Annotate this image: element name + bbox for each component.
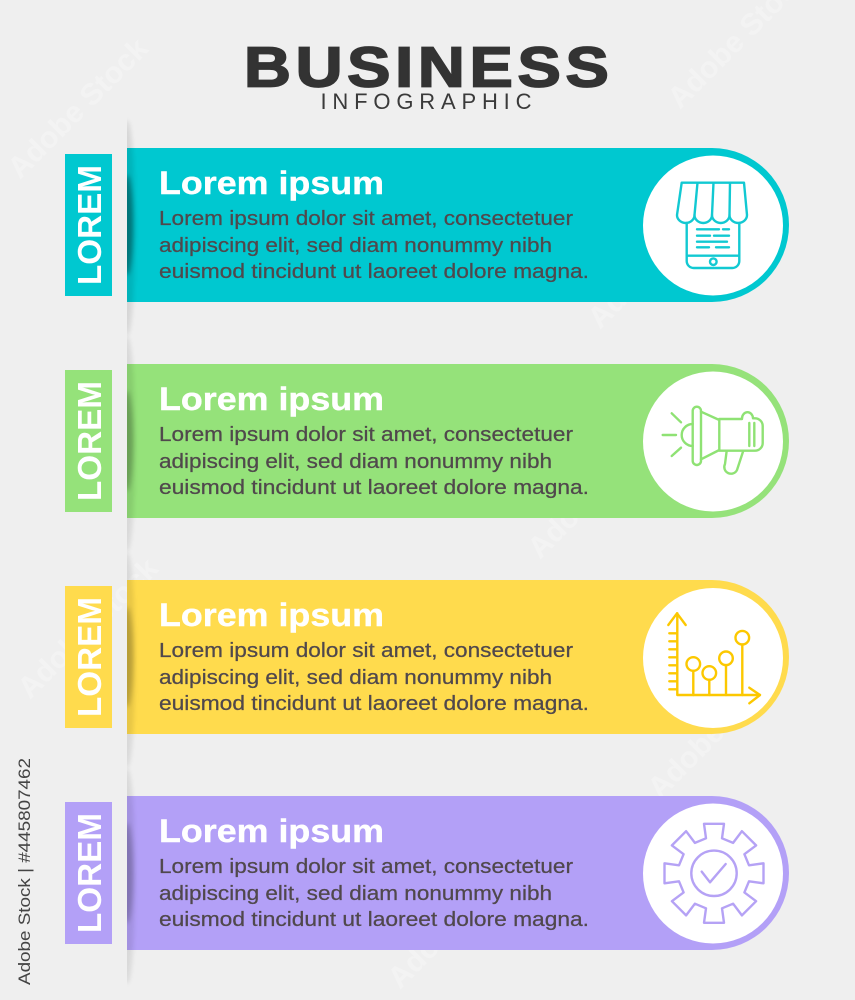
banner bbox=[127, 580, 789, 734]
panel body text: adipiscing elit, sed diam nonummy nibh bbox=[159, 451, 552, 473]
panel body text: Lorem ipsum dolor sit amet, consectetuer bbox=[159, 208, 573, 230]
icon: shop on tablet bbox=[643, 156, 783, 296]
side tab: LOREM bbox=[71, 165, 108, 285]
panel body text: euismod tincidunt ut laoreet dolore magna. bbox=[159, 693, 589, 715]
watermark: Adobe Stock bbox=[582, 182, 735, 335]
title bbox=[244, 35, 609, 114]
icon: lollipop chart bbox=[643, 588, 783, 728]
panel body text: Lorem ipsum dolor sit amet, consectetuer bbox=[159, 856, 573, 878]
panel body text: euismod tincidunt ut laoreet dolore magna. bbox=[159, 477, 589, 499]
watermark: Adobe Stock bbox=[522, 412, 675, 565]
panel body text: euismod tincidunt ut laoreet dolore magna. bbox=[159, 909, 589, 931]
banner bbox=[127, 796, 789, 950]
banner bbox=[127, 148, 789, 302]
watermark: Adobe Stock bbox=[382, 842, 535, 995]
panel body text: adipiscing elit, sed diam nonummy nibh bbox=[159, 235, 552, 257]
subheading: infographic: INFOGRAPHIC bbox=[320, 89, 532, 114]
panel heading: Lorem ipsum bbox=[159, 813, 384, 849]
panel body text bbox=[159, 208, 589, 283]
panel: marketing bbox=[65, 336, 789, 552]
panel body text: Lorem ipsum dolor sit amet, consectetuer bbox=[159, 424, 573, 446]
panel body text bbox=[159, 424, 589, 499]
panel body text: adipiscing elit, sed diam nonummy nibh bbox=[159, 667, 552, 689]
panel heading: Lorem ipsum bbox=[159, 165, 384, 201]
side tab: LOREM bbox=[71, 813, 108, 933]
watermark: Adobe Stock bbox=[12, 552, 165, 705]
side tab bbox=[65, 586, 112, 728]
side tab bbox=[65, 802, 112, 944]
panel heading: Lorem ipsum bbox=[159, 597, 384, 633]
panel body text: Lorem ipsum dolor sit amet, consectetuer bbox=[159, 640, 573, 662]
banner bbox=[127, 364, 789, 518]
icon: gear with check bbox=[643, 804, 783, 944]
panel: online shop bbox=[65, 120, 789, 336]
side tab: LOREM bbox=[71, 597, 108, 717]
panel heading: Lorem ipsum bbox=[159, 381, 384, 417]
side tab bbox=[65, 370, 112, 512]
watermark: Adobe Stock bbox=[2, 32, 155, 185]
icon: megaphone bbox=[643, 372, 783, 512]
side tab bbox=[65, 154, 112, 296]
panel body text: euismod tincidunt ut laoreet dolore magna. bbox=[159, 261, 589, 283]
panel body text bbox=[159, 640, 589, 715]
panel body text bbox=[159, 856, 589, 931]
watermark: Adobe Stock bbox=[642, 652, 795, 805]
side tab: LOREM bbox=[71, 381, 108, 501]
panel body text: adipiscing elit, sed diam nonummy nibh bbox=[159, 883, 552, 905]
panel: analytics bbox=[65, 552, 789, 768]
stock id caption: Adobe Stock | #445807462 bbox=[15, 758, 34, 985]
panel: settings bbox=[65, 768, 789, 984]
heading: business: BUSINESS bbox=[244, 35, 609, 98]
